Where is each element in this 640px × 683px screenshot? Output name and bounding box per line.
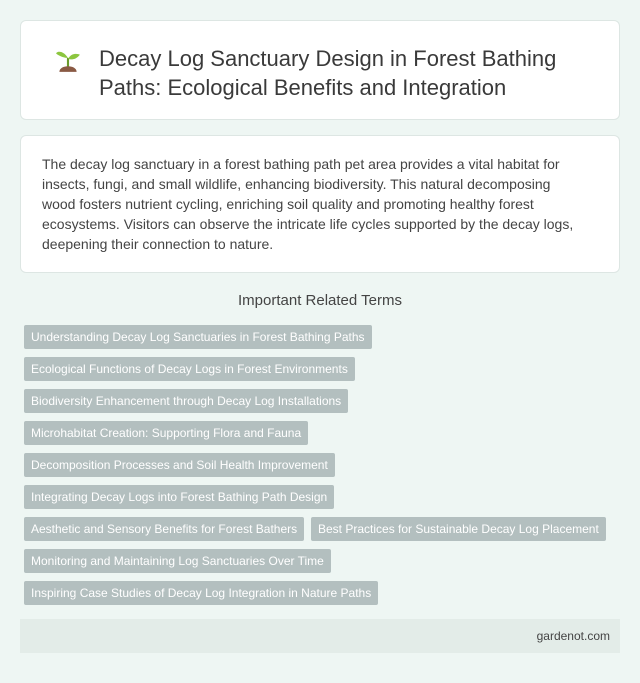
footer: gardenot.com: [537, 629, 610, 643]
related terms tags: Microhabitat Creation: Supporting Flora and Fauna: [31, 426, 301, 440]
related terms tags: Biodiversity Enhancement through Decay Log Installations: [31, 394, 341, 408]
description panel: [20, 135, 620, 273]
related terms tags: Decomposition Processes and Soil Health Improvement: [31, 458, 328, 472]
description panel: The decay log sanctuary in a forest bathing path pet area provides a vital habitat for insects, fungi, and small wildlife, enhancing biodiversity. This natural decomposing wood fosters nutrient cycling, enriching soil quality and promoting healthy forest ecosystems. Visitors can observe the intricate life cycles supported by the decay logs, deepening their connection to nature.: [42, 156, 573, 252]
related terms tags: Understanding Decay Log Sanctuaries in Forest Bathing Paths: [31, 330, 365, 344]
related terms tags: Best Practices for Sustainable Decay Log Placement: [318, 522, 599, 536]
related terms tags: Aesthetic and Sensory Benefits for Forest Bathers: [31, 522, 297, 536]
related terms tags: Integrating Decay Logs into Forest Bathing Path Design: [31, 490, 327, 504]
section heading: Important Related Terms: [238, 292, 402, 309]
footer: [20, 619, 620, 653]
related terms tags: Monitoring and Maintaining Log Sanctuaries Over Time: [31, 554, 324, 568]
related terms tags: Inspiring Case Studies of Decay Log Integration in Nature Paths: [31, 586, 371, 600]
header panel: [20, 20, 620, 120]
related terms tags: Ecological Functions of Decay Logs in Forest Environments: [31, 362, 348, 376]
icon: seedling: [56, 52, 80, 72]
title: Decay Log Sanctuary Design in Forest Bathing Paths: Ecological Benefits and Integration: [99, 46, 556, 100]
